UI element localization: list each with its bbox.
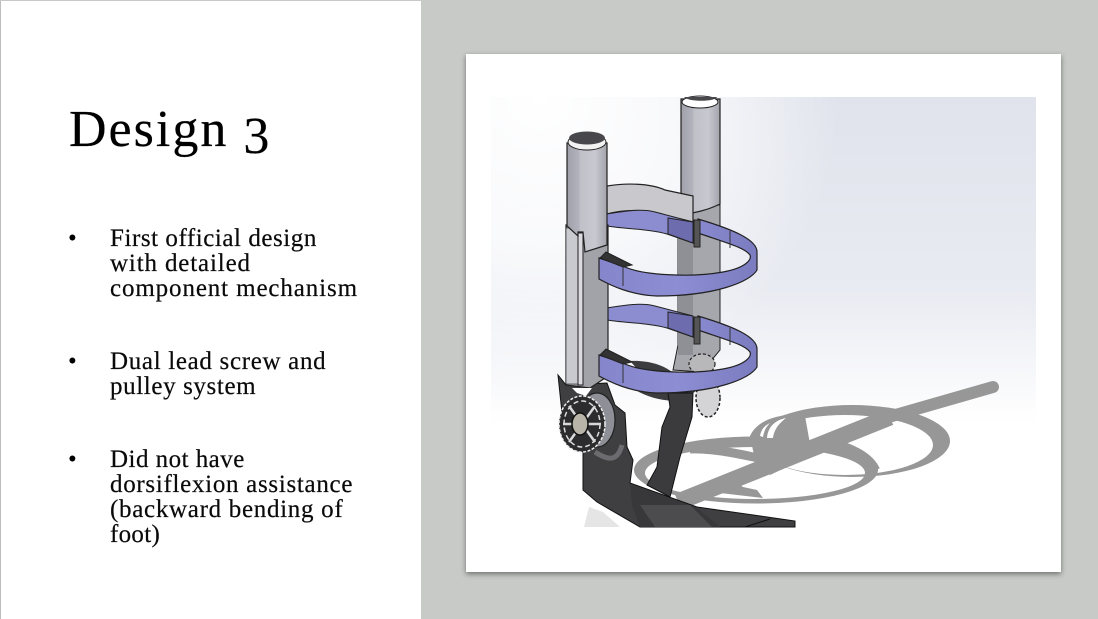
bullet 1: with detailed — [110, 250, 251, 277]
bullet 3 — [68, 446, 353, 548]
bullet 3: foot) — [110, 521, 160, 548]
panel: gray right background — [421, 0, 1098, 619]
bullet 1: First official design — [110, 225, 317, 252]
bullet 1: • — [68, 225, 77, 252]
bullet 2: pulley system — [110, 373, 256, 400]
carbon fibre foot plate — [558, 361, 795, 527]
front pulley — [559, 393, 615, 452]
left slide border — [0, 0, 1, 619]
bullet 1 — [68, 225, 358, 302]
right column — [673, 96, 720, 372]
image card — [466, 54, 1061, 572]
bullet list — [68, 225, 358, 548]
bullet 1: component mechanism — [110, 275, 358, 302]
bullet 3: dorsiflexion assistance — [110, 471, 353, 498]
upper front strap — [599, 219, 757, 296]
bullet 2: Dual lead screw and — [110, 348, 326, 375]
bullet 2 — [68, 348, 326, 400]
rear pulley — [689, 354, 720, 417]
left column with cylinder — [566, 132, 608, 396]
bullet 3: (backward bending of — [110, 496, 343, 523]
cast shadow on the floor — [634, 387, 993, 503]
bullet 3: • — [68, 446, 77, 473]
lower front strap — [599, 316, 757, 393]
title: Design 3 — [69, 101, 271, 165]
image background gradient — [491, 97, 1036, 527]
upper back strap — [607, 184, 693, 243]
bullet 3: Did not have — [110, 446, 245, 473]
lower back strap — [607, 304, 693, 337]
bullet 2: • — [68, 348, 77, 375]
